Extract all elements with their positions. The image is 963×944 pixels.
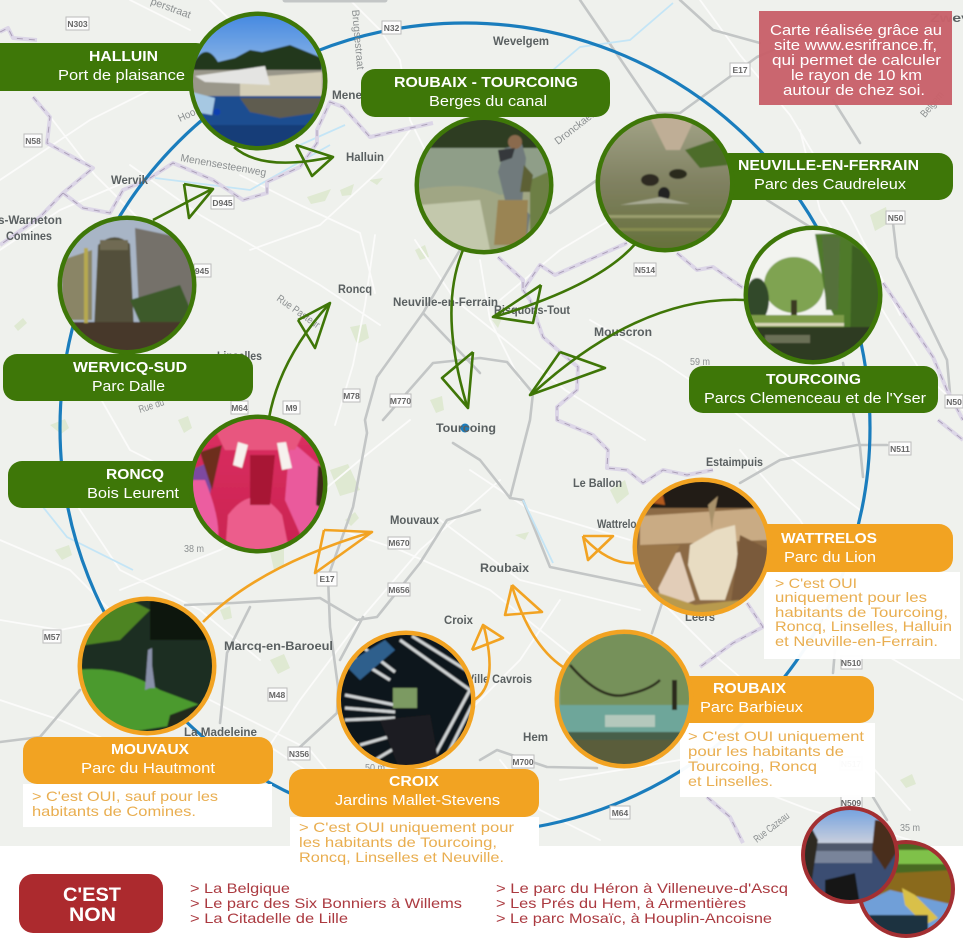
- map: place names: Hoo: [176, 106, 198, 125]
- map: place names: Rue du: [137, 396, 166, 416]
- panel: Wattrelos: [632, 478, 960, 659]
- map: road shields: N517: [841, 759, 861, 769]
- conditions: Roubaix: et Linselles.: [688, 773, 773, 789]
- conditions: Croix: > C'est OUI uniquement pour: [299, 819, 514, 835]
- conditions: Roubaix: pour les habitants de: [688, 743, 844, 759]
- map: place names: Croix: [444, 613, 473, 627]
- list: excluded places, column 2: > Le parc du Héron à Villeneuve-d'Ascq: [496, 880, 788, 896]
- conditions: Croix: [290, 817, 539, 865]
- white footer background: [0, 846, 963, 944]
- map: place names: Ville Cavrois: [467, 672, 532, 686]
- label: Halluin: [0, 43, 210, 91]
- label: Roubaix: ROUBAIX: [713, 680, 786, 697]
- conditions: Roubaix: Tourcoing, Roncq: [688, 758, 817, 774]
- label: Croix: CROIX: [389, 773, 439, 790]
- map: road shields: N356: [289, 749, 309, 759]
- arrow: Roubaix-Tourcoing: [442, 250, 473, 408]
- map: road shields: M700: [512, 757, 534, 767]
- map: place names: Zwev: [930, 11, 963, 25]
- photo: tower in the woods: [58, 216, 198, 356]
- label: Wattrelos: [750, 524, 953, 572]
- arrow: Tourcoing: [530, 300, 745, 395]
- list: excluded places, column 1: [190, 880, 462, 926]
- label: Roncq: Bois Leurent: [87, 485, 180, 502]
- map: place names: Hem: [523, 730, 548, 744]
- button: C'est non: C'EST: [63, 885, 121, 906]
- label: Roncq: RONCQ: [106, 466, 164, 483]
- map: road shields: N511: [890, 444, 910, 454]
- conditions: Mouvaux: habitants de Comines.: [32, 803, 196, 819]
- map: road shields: N32: [384, 23, 400, 33]
- arrow: Wattrelos: [583, 536, 635, 563]
- panel: Roubaix: [554, 630, 875, 797]
- map: place names: Roncq: [338, 282, 372, 296]
- map: road shields: N510: [841, 658, 861, 668]
- map: road shields: N50: [888, 213, 904, 223]
- map: place names: Halluin: [346, 150, 384, 164]
- map: place names: Leers: [685, 610, 715, 624]
- panel: Roncq: [8, 414, 328, 555]
- label: Roubaix-Tourcoing: [361, 69, 610, 117]
- label: Tourcoing: Parcs Clemenceau et de l'Yser: [704, 390, 926, 407]
- arrow: Roubaix: [505, 585, 563, 667]
- label: Neuville-en-Ferrain: [715, 153, 953, 200]
- map: place names: Wattrelos: [597, 517, 642, 531]
- note: how the map was made: Carte réalisée grâce au: [770, 23, 942, 39]
- map: place names: Rue Pasteur: [274, 293, 322, 331]
- note: how the map was made: le rayon de 10 km: [791, 68, 922, 84]
- photo: marina: [188, 10, 328, 156]
- list: excluded places, column 1: > La Citadelle de Lille: [190, 910, 348, 926]
- label: Wervicq-Sud: WERVICQ-SUD: [73, 359, 187, 376]
- map: centre point: [460, 424, 470, 432]
- arrow: Halluin: [234, 145, 333, 176]
- panel: Mouvaux: [23, 596, 273, 827]
- photo: jetty at dusk: [801, 806, 899, 905]
- map: place names: Risquons-Tout: [494, 303, 570, 317]
- button: C'est non: [19, 874, 163, 933]
- note: how the map was made: [759, 11, 952, 105]
- map: place names: Mouscron: [594, 325, 652, 339]
- map: road shields: M64: [231, 403, 248, 413]
- list: excluded places, column 2: > Le parc Mosaïc, à Houplin-Ancoisne: [496, 910, 772, 926]
- label: Mouvaux: Parc du Hautmont: [81, 760, 216, 777]
- list: excluded places, column 2: > Les Prés du Hem, à Armentières: [496, 895, 746, 911]
- label: Wervicq-Sud: [3, 354, 253, 401]
- map: place names: Brugsestraat: [349, 9, 366, 70]
- conditions: Roubaix: > C'est OUI uniquement: [688, 728, 864, 744]
- arrow: Neuville-en-Ferrain: [493, 243, 636, 323]
- map: place names: 38 m: [184, 543, 204, 555]
- photo: pink sculpture: [188, 414, 328, 555]
- conditions: Mouvaux: > C'est OUI, sauf pour les: [32, 788, 218, 804]
- map: place names: Estaimpuis: [706, 455, 763, 469]
- photo: heron: [78, 596, 218, 738]
- arrow: Roncq: [269, 303, 330, 418]
- label: Tourcoing: TOURCOING: [766, 371, 861, 388]
- map: place names: Wervik: [111, 173, 148, 187]
- label: Wattrelos: WATTRELOS: [781, 530, 877, 547]
- map: road shields: M48: [269, 690, 286, 700]
- note: how the map was made: autour de chez soi.: [783, 83, 925, 99]
- panel: Croix: [289, 630, 539, 865]
- map: road shields: M64: [612, 808, 629, 818]
- conditions: Mouvaux: [23, 784, 272, 827]
- map: place names: Mouvaux: [390, 513, 439, 527]
- label: Halluin: HALLUIN: [89, 48, 158, 65]
- conditions: Wattrelos: [764, 572, 960, 659]
- map: road shields: M770: [390, 396, 411, 406]
- panel: Wervicq-Sud: [3, 216, 253, 401]
- map: place names: 35 m: [900, 822, 920, 834]
- arrow: Croix: [470, 625, 503, 702]
- label: Roubaix-Tourcoing: ROUBAIX - TOURCOING: [394, 74, 578, 91]
- arrow: Mouvaux: [203, 530, 372, 622]
- map: road shields: M656: [388, 585, 410, 595]
- label: Croix: Jardins Mallet-Stevens: [335, 792, 500, 809]
- photo: goats: [632, 478, 773, 620]
- map: place names: Neuville-en-Ferrain: [393, 295, 498, 309]
- list: excluded places, column 1: > Le parc des Six Bonniers à Willems: [190, 895, 462, 911]
- map: place names: 50 m: [365, 762, 385, 774]
- label: Wervicq-Sud: Parc Dalle: [92, 378, 165, 395]
- map: place names: Wevelgem: [493, 34, 549, 48]
- label: Croix: [289, 769, 539, 817]
- list: excluded places, column 1: > La Belgique: [190, 880, 290, 896]
- label: Neuville-en-Ferrain: NEUVILLE-EN-FERRAIN: [738, 157, 919, 174]
- conditions: Croix: les habitants de Tourcoing,: [299, 834, 497, 850]
- map: road shields: N50: [946, 397, 962, 407]
- conditions: Wattrelos: habitants de Tourcoing,: [775, 604, 948, 620]
- map: place names: Le Ballon: [573, 476, 622, 490]
- conditions: Wattrelos: Roncq, Linselles, Halluin: [775, 618, 952, 634]
- map: place names: Rue Cazeau: [751, 810, 792, 845]
- panel: Tourcoing: [689, 226, 938, 413]
- map: place names: Comines: [6, 229, 52, 243]
- panel: Halluin: [0, 10, 328, 156]
- map: place names: Roubaix: [480, 561, 529, 575]
- map: road shields: N509: [841, 798, 861, 808]
- map: place names: Menensesteenweg: [179, 152, 267, 179]
- map: place names: Mene: [332, 88, 362, 102]
- conditions: Wattrelos: > C'est OUI: [775, 575, 857, 591]
- map: 10 km radius circle: [60, 23, 870, 833]
- map: place names: La Madeleine: [184, 725, 257, 739]
- list: excluded places, column 2: [496, 880, 788, 926]
- map: road shields: E17: [319, 574, 335, 584]
- photo: slatted tunnel: [336, 630, 477, 771]
- button: C'est non: NON: [69, 905, 116, 926]
- photo: park with pond and willow: [744, 226, 882, 368]
- map: road shields: N58: [25, 136, 41, 146]
- arrow: Wervicq-Sud: [153, 184, 213, 220]
- map: place names: Tourcoing: [436, 421, 496, 435]
- map: place names: Belgem: [918, 89, 947, 120]
- label: Roubaix: Parc Barbieux: [700, 699, 804, 716]
- note: how the map was made: site www.esrifrance.fr,: [774, 38, 937, 54]
- map: road shields: M57: [44, 632, 61, 642]
- map: road shields: M670: [388, 538, 410, 548]
- map: place names: Dronckaert: [552, 107, 599, 147]
- label: Roubaix: [670, 676, 874, 723]
- panel: Roubaix-Tourcoing: [361, 69, 610, 255]
- conditions: Croix: Roncq, Linselles et Neuville.: [299, 849, 504, 865]
- map: road shields: D945: [212, 198, 233, 208]
- map: road shields: 945: [195, 266, 209, 276]
- label: Mouvaux: MOUVAUX: [111, 741, 189, 758]
- photo: ducks on the pond: [596, 114, 734, 254]
- conditions: Roubaix: [680, 723, 875, 797]
- photo: kayak on the lake: [857, 840, 955, 940]
- label: Mouvaux: [23, 737, 273, 784]
- note: how the map was made: qui permet de calculer: [772, 53, 941, 69]
- label: Tourcoing: [689, 366, 938, 413]
- map: road shields: M78: [343, 391, 360, 401]
- label: Wattrelos: Parc du Lion: [784, 549, 876, 566]
- conditions: Wattrelos: et Neuville-en-Ferrain.: [775, 633, 938, 649]
- panel: Neuville-en-Ferrain: [596, 114, 953, 254]
- map: place names: 59 m: [690, 356, 710, 368]
- photo: birdwatcher by the canal: [414, 115, 555, 255]
- map: road shields: N514: [635, 265, 655, 275]
- map: place names: Marcq-en-Baroeul: [224, 639, 333, 653]
- label: Neuville-en-Ferrain: Parc des Caudreleux: [754, 176, 907, 193]
- conditions: Wattrelos: uniquement pour les: [775, 589, 927, 605]
- map: road shields: M9: [286, 403, 298, 413]
- map: road shields: E17: [732, 65, 748, 75]
- map: place names: Linselles: [217, 349, 262, 363]
- label: Roubaix-Tourcoing: Berges du canal: [429, 93, 547, 110]
- label: Roncq: [8, 461, 213, 508]
- label: Halluin: Port de plaisance: [58, 67, 185, 84]
- map: road shields: N303: [67, 19, 88, 29]
- photo: lake under trees: [554, 630, 695, 770]
